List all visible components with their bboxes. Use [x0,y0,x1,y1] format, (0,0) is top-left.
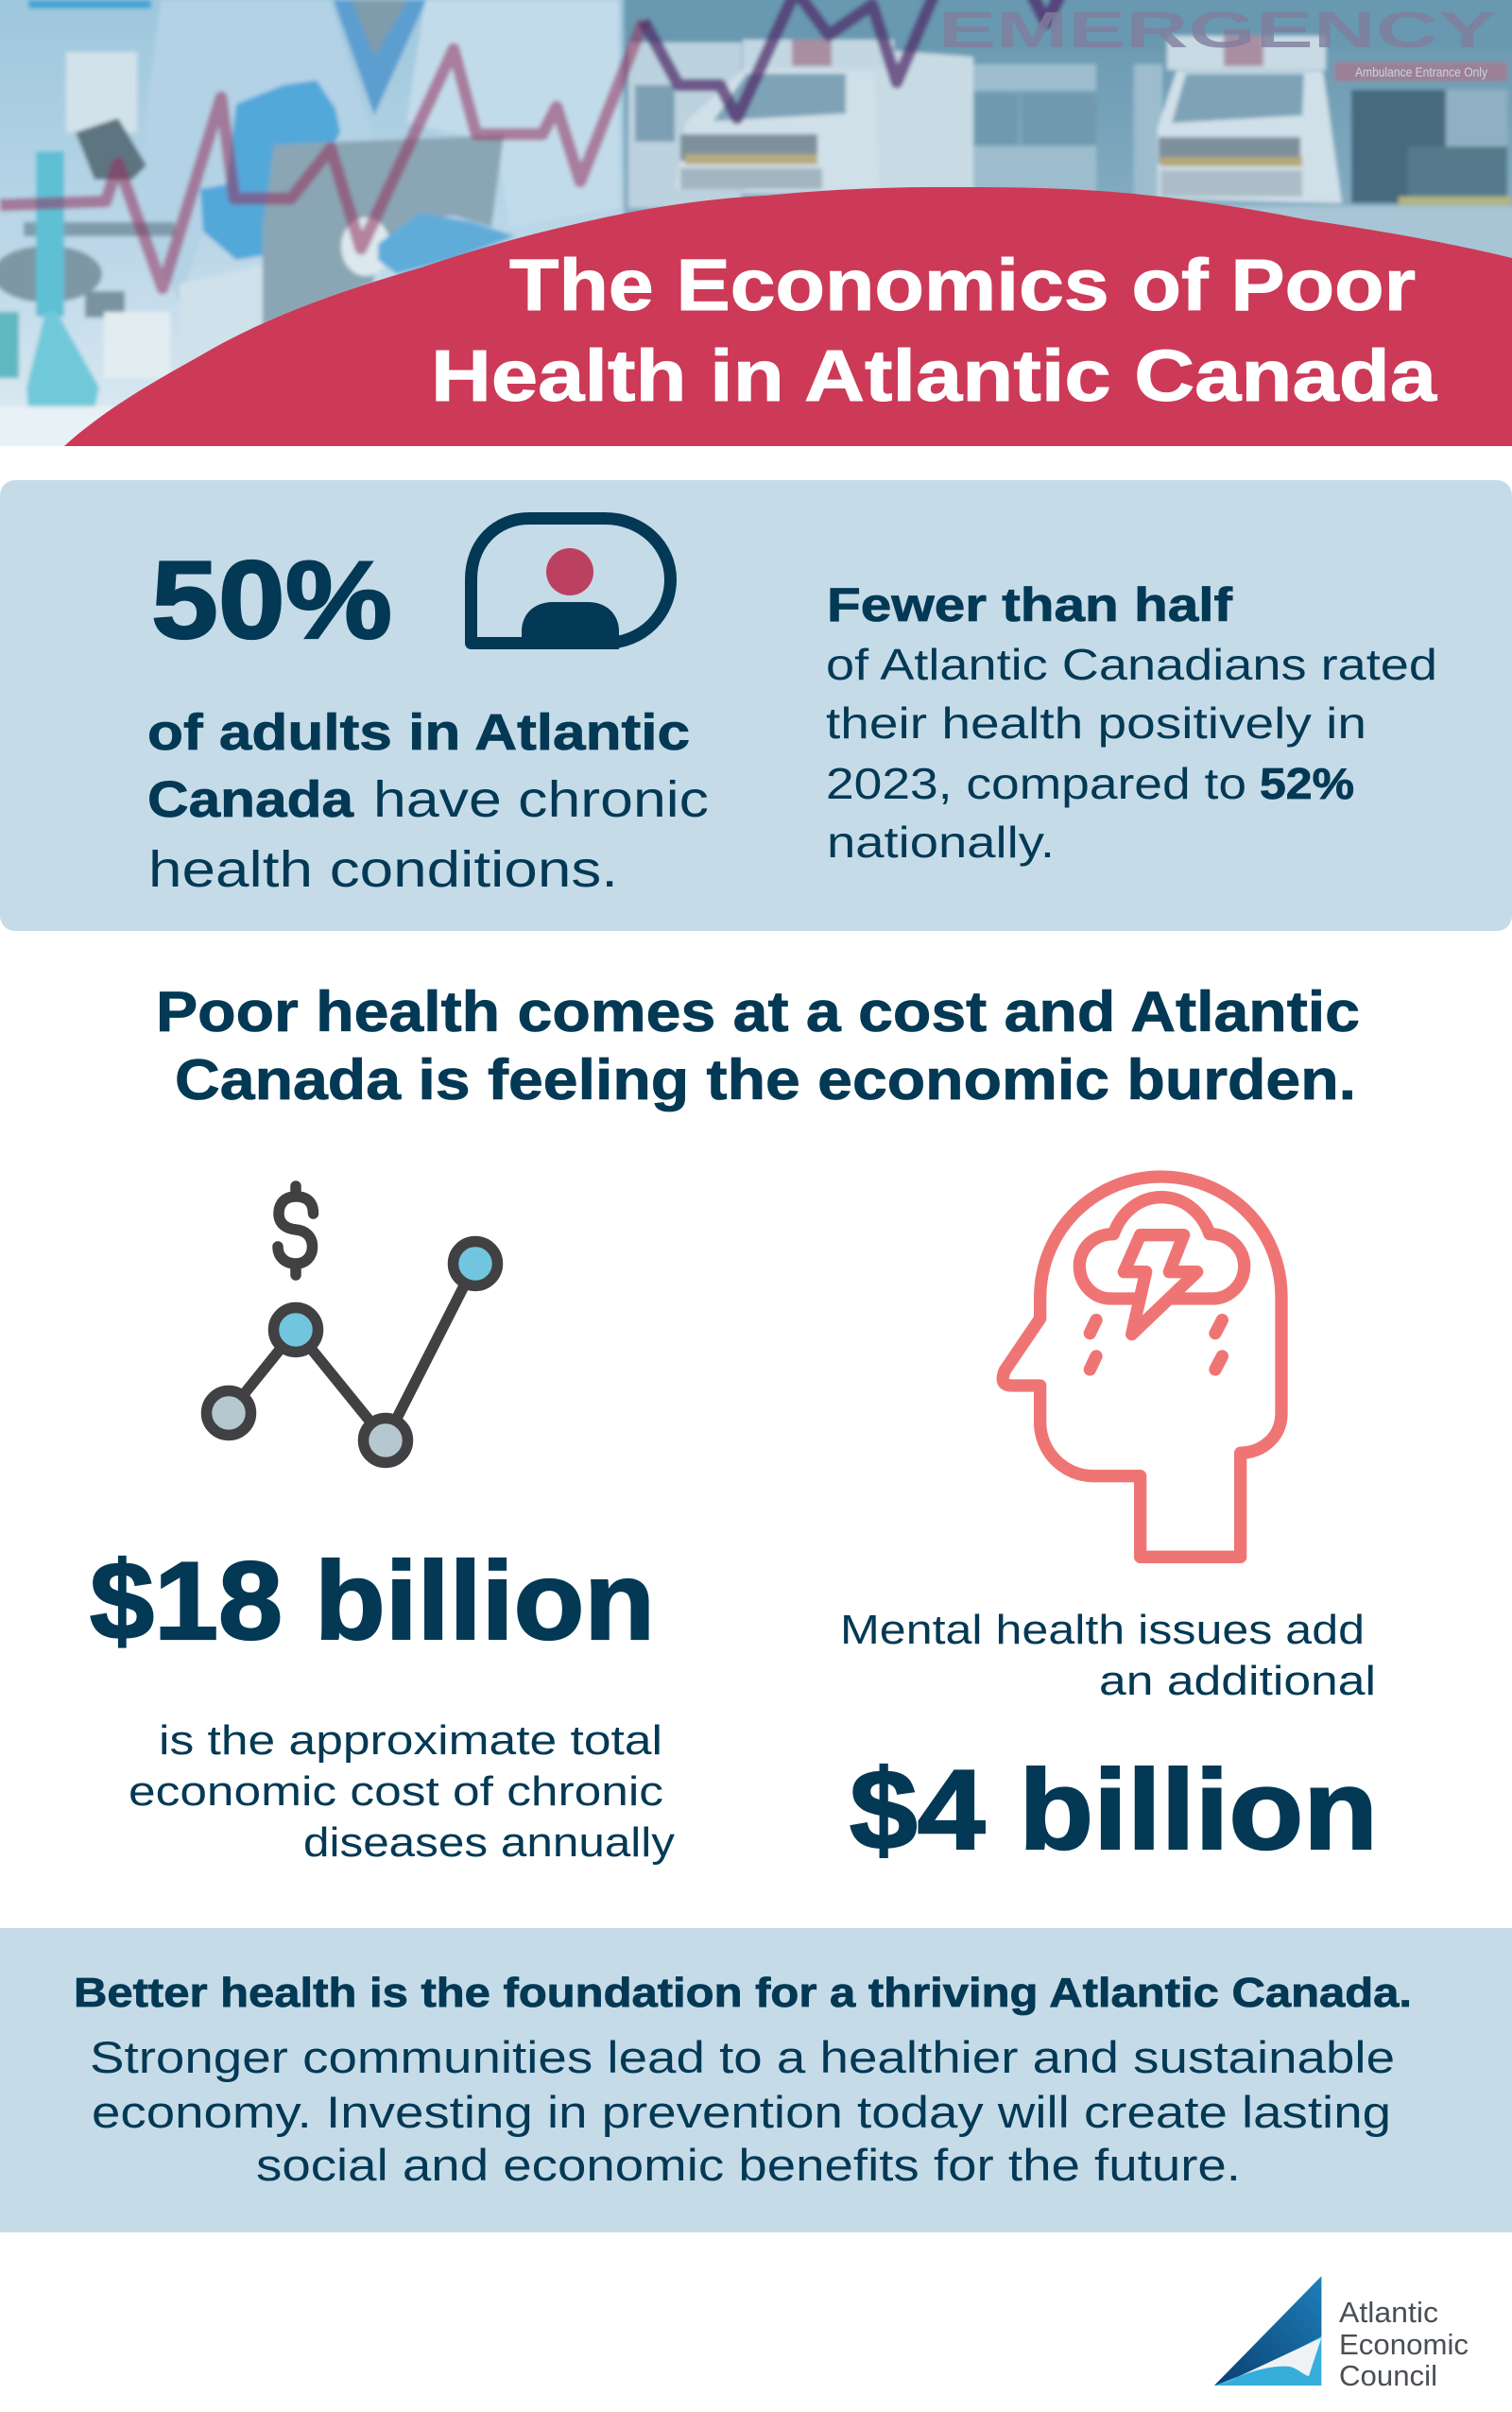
text: adults with chronic conditions: have chronic [373,771,709,828]
logo wordmark: Council [1339,2359,1437,2392]
photo sign lettering [938,2,1496,79]
text: adults with chronic conditions: Canada [147,771,354,828]
logo: Atlantic Economic Council [1214,2276,1469,2392]
heading: economic burden [156,980,1360,1111]
text: fewer than half: 52% [1260,759,1354,808]
panel: chronic conditions [0,480,1512,931]
text: mental health: an additional [1099,1658,1376,1704]
icon: head with storm cloud [1003,1177,1281,1557]
title: The Economics of Poor [509,245,1416,326]
logo wordmark: Atlantic [1339,2296,1438,2329]
icon: dollar line chart [206,1186,497,1463]
header photo: lab and ambulances [0,0,1512,456]
header red arc [64,187,1512,446]
panel body: Stronger communities lead to a healthier and sustainable [90,2032,1395,2082]
text: fewer than half [826,578,1437,867]
lab coat highlights [150,0,359,297]
text: adults with chronic conditions: of adults in Atlantic [147,704,690,761]
icon: person in frame [471,518,671,649]
title: Health in Atlantic Canada [431,336,1437,417]
statistic: $18 billion: $18 billion [90,1539,655,1663]
text: chronic disease cost [129,1717,675,1866]
text: fewer than half: nationally. [827,818,1055,867]
text: mental health [840,1607,1376,1704]
ambulances [628,43,742,208]
logo wordmark [1339,2296,1469,2392]
logo mark [1214,2276,1321,2386]
panel body [90,2032,1395,2190]
heading: economic burden: Canada is feeling the economic burden. [175,1048,1356,1111]
text: chronic disease cost: is the approximate total [159,1717,662,1764]
text: fewer than half: 2023, compared to [826,759,1246,808]
text: fewer than half: their health positively in [826,698,1366,748]
panel: better health [0,1928,1512,2232]
statistic: $4 billion: $4 billion [850,1747,1378,1873]
photo sign lettering: Ambulance Entrance Only [1355,64,1487,79]
panel body: social and economic benefits for the future. [256,2140,1241,2190]
text: fewer than half: of Atlantic Canadians rated [826,640,1437,689]
text: mental health: Mental health issues add [840,1607,1365,1653]
title [431,245,1437,417]
ECG line [0,21,644,288]
text: adults with chronic conditions [147,704,709,898]
logo wordmark: Economic [1339,2328,1469,2361]
text: adults with chronic conditions: health conditions. [148,841,618,898]
panel body: economy. Investing in prevention today will create lasting [92,2087,1391,2137]
heading: economic burden: Poor health comes at a cost and Atlantic [156,980,1360,1043]
text: fewer than half: Fewer than half [827,578,1232,631]
panel heading: Better health is the foundation for a thriving Atlantic Canada. [74,1970,1412,2016]
text: chronic disease cost: economic cost of chronic [129,1768,663,1815]
text: chronic disease cost: diseases annually [303,1819,675,1866]
50% statistic: 50% [151,538,392,662]
photo sign lettering: EMERGENCY [938,2,1496,59]
building wall [624,0,1512,49]
